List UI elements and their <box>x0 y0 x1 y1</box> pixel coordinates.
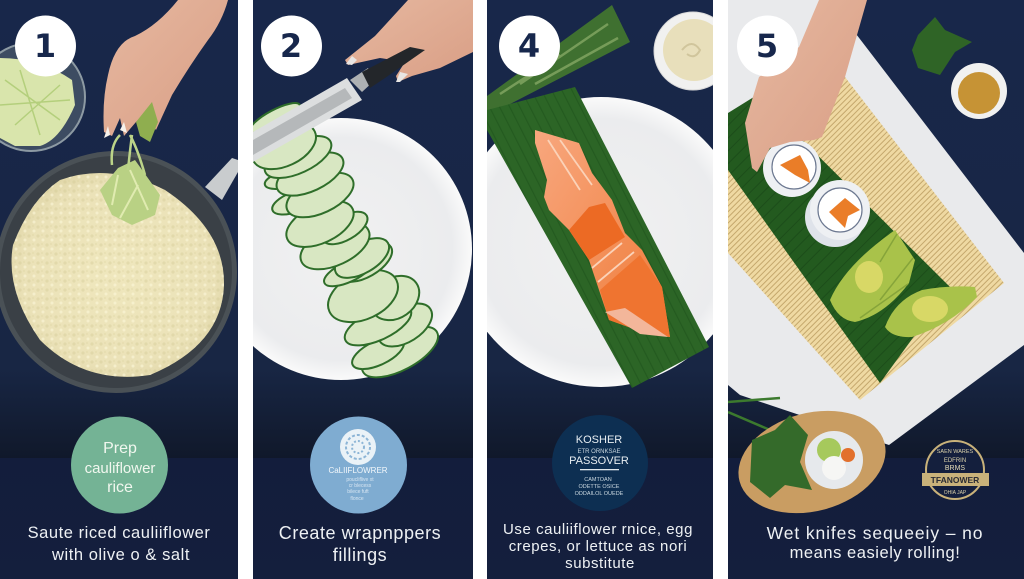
caption: step 3 <box>504 523 692 568</box>
step number 1 <box>15 16 76 76</box>
badge: kosher for passover: KOSHER <box>576 434 622 446</box>
icon: wooden plate with sushi <box>728 396 886 514</box>
badge: emblem <box>922 441 989 499</box>
caption: step 2 <box>279 523 441 565</box>
icon: chef knife <box>253 47 425 162</box>
caption: step 3: crepes, or lettuce as nori <box>509 538 687 555</box>
icon: glass bowl of shredded cauliflower <box>0 43 85 151</box>
icon: white plate <box>487 97 713 387</box>
caption: step 3: substitute <box>565 555 635 572</box>
badge: emblem: BRMS <box>945 465 965 472</box>
badge: prep cauliflower rice: rice <box>107 479 133 496</box>
step number 2 <box>261 16 322 76</box>
caption: step 2: fillings <box>333 545 387 565</box>
step number 5 <box>737 16 798 76</box>
icon: bowl of cream sauce <box>654 12 713 90</box>
caption: step 1: with olive o & salt <box>51 546 190 564</box>
step number 1: 1 <box>34 27 56 65</box>
panel: step 2 <box>253 0 473 579</box>
badge: cauliflower label: bilece fuft <box>347 489 369 495</box>
step number 5: 5 <box>756 27 778 65</box>
icon: banana leaf <box>487 87 709 388</box>
badge: cauliflower label: cr blecess <box>349 483 372 489</box>
icon: green leaf <box>728 95 950 383</box>
badge: prep cauliflower rice <box>71 416 168 514</box>
caption: step 5: means easiely rolling! <box>790 544 960 562</box>
badge: emblem: EDFRIN <box>944 458 966 464</box>
icon: bamboo mat <box>728 77 1004 400</box>
badge: cauliflower label: flonce <box>350 496 364 502</box>
icon: marble board <box>728 0 1024 445</box>
badge: kosher for passover: ODETTE OSICE <box>579 484 620 490</box>
icon: sushi rolls <box>763 139 870 247</box>
panel: step 3 <box>487 0 713 579</box>
caption: step 1: Saute riced cauliiflower <box>28 524 210 542</box>
badge: emblem: SAEN WARES <box>937 449 974 455</box>
badge: prep cauliflower rice: Prep <box>103 440 137 457</box>
icon: bowl of spice <box>951 63 1007 119</box>
step number 4: 4 <box>518 27 540 65</box>
step number 2: 2 <box>280 27 302 65</box>
icon: avocado <box>830 230 977 337</box>
badge: emblem: OHIA JAP <box>944 490 967 496</box>
panel: step 5 <box>727 0 1024 579</box>
badge: kosher for passover: ETR ORNKSAE <box>577 449 621 455</box>
icon: whole cucumber <box>487 5 630 116</box>
caption: step 3: Use cauliiflower rnice, egg <box>503 521 693 538</box>
step number 4 <box>499 16 560 76</box>
badge: kosher for passover: ODDAILOL OUEDE <box>575 491 624 497</box>
badge: kosher for passover: CAMTOAN <box>584 477 612 483</box>
badge: kosher for passover <box>552 415 648 511</box>
caption: step 5: Wet knifes sequeeiy – no <box>767 523 983 543</box>
icon: pan with riced cauliflower <box>0 135 238 393</box>
icon: salmon fillet <box>535 130 670 337</box>
badge: kosher for passover: PASSOVER <box>569 455 629 467</box>
icon: hand sprinkling cucumber <box>104 0 228 142</box>
icon: parsley <box>912 17 972 75</box>
caption: step 2: Create wrapnppers <box>279 523 441 543</box>
caption: step 5 <box>767 523 983 562</box>
icon: white plate <box>253 118 472 380</box>
panel: step 1 <box>0 0 238 579</box>
icon: hand holding knife <box>345 0 473 82</box>
badge: emblem: TFANOWER <box>931 475 979 485</box>
caption: step 1 <box>28 526 210 560</box>
icon: sliced cucumber <box>245 98 446 388</box>
badge: prep cauliflower rice: cauliflower <box>85 460 155 477</box>
badge: cauliflower label: CaLIIFLOWRER <box>328 466 388 475</box>
icon: hand placing roll <box>745 0 867 172</box>
badge: cauliflower label: poucliflive xt <box>346 477 374 483</box>
badge: cauliflower label <box>310 416 407 514</box>
